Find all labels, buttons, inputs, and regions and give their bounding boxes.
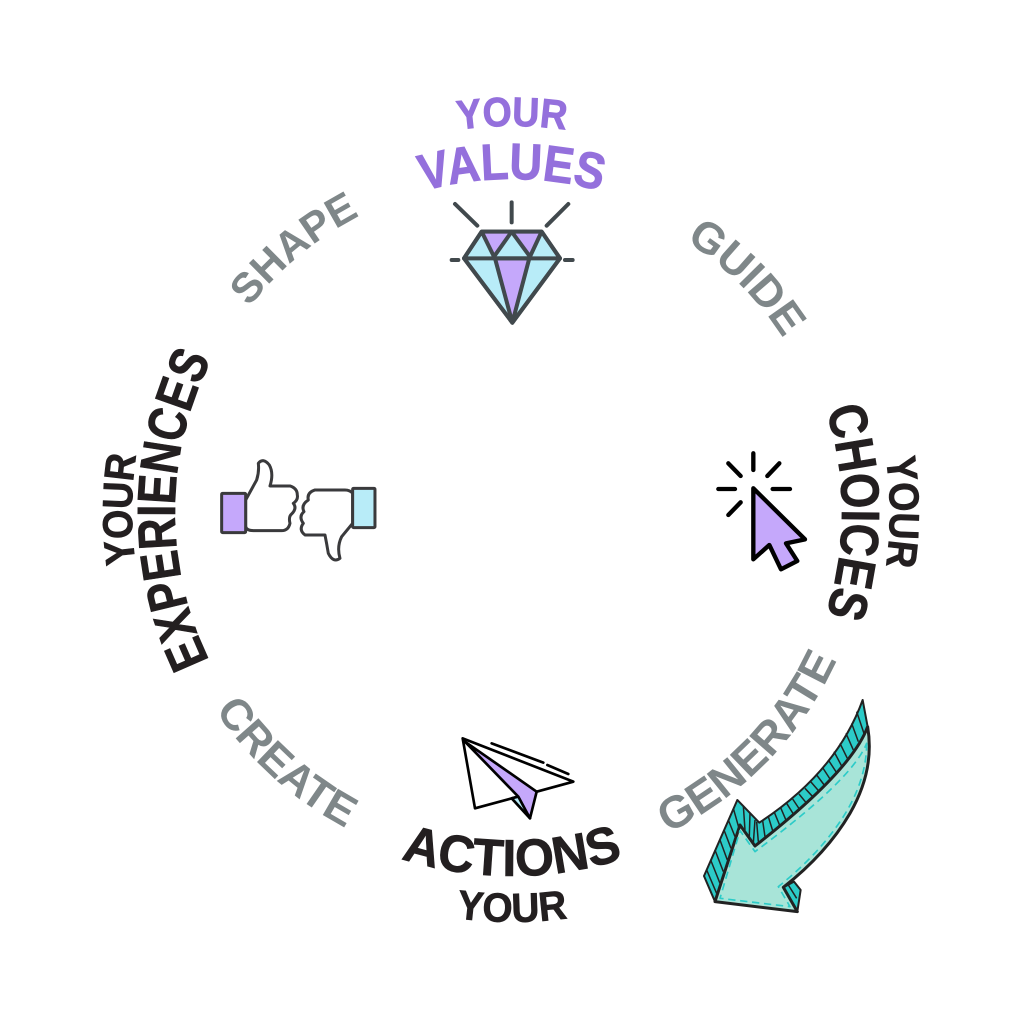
heading: your experiences	[102, 348, 208, 674]
icon: diamond	[452, 202, 573, 323]
heading: your choices: YOUR	[886, 454, 920, 567]
icon: cursor	[718, 453, 805, 569]
heading: your actions: YOUR	[459, 890, 568, 922]
connector label: guide: GUIDE	[692, 222, 807, 337]
icon: paper plane	[463, 738, 573, 818]
connector label: create: CREATE	[221, 699, 358, 828]
connector label: generate: GENERATE	[660, 648, 836, 828]
heading: your choices: CHOICES	[828, 405, 880, 620]
heading: your values: YOUR	[455, 97, 566, 130]
heading: your choices	[828, 405, 920, 620]
heading: your values: VALUES	[414, 143, 605, 189]
heading: your actions: ACTIONS	[402, 827, 620, 876]
connector label: shape: SHAPE	[232, 192, 358, 302]
icon: curved arrow	[704, 700, 869, 912]
icon: thumbs up and thumbs down	[222, 461, 375, 560]
heading: your actions	[402, 827, 620, 922]
heading: your experiences: YOUR	[102, 454, 136, 566]
heading: your values	[414, 97, 605, 189]
heading: your experiences: EXPERIENCES	[138, 348, 208, 674]
